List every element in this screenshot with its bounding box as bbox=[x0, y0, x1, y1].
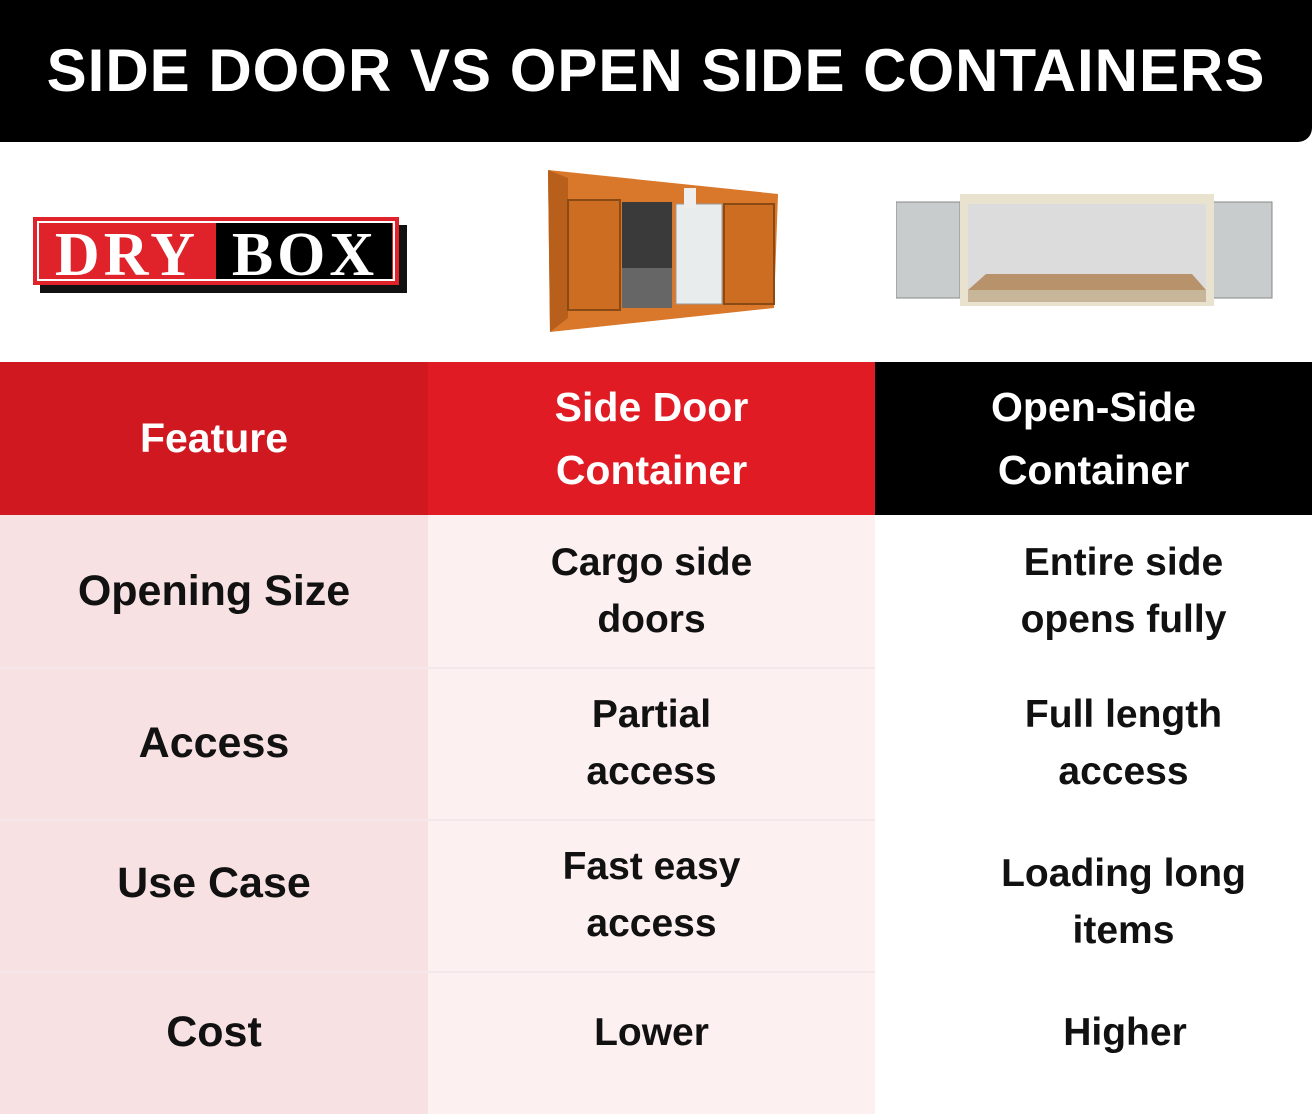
row: opening size: Entire side bbox=[1024, 541, 1223, 584]
row: opening size: Opening Size bbox=[78, 566, 350, 614]
row: cost: Cost bbox=[166, 1008, 262, 1056]
row: access: Full length bbox=[1025, 693, 1222, 736]
row: use case: Loading long bbox=[1001, 852, 1246, 894]
header: open-side container: Open-Side bbox=[991, 384, 1196, 430]
row: cost: Lower bbox=[594, 1010, 709, 1054]
title: SIDE DOOR VS OPEN SIDE CONTAINERS bbox=[47, 37, 1265, 104]
header: side door container bbox=[428, 362, 875, 515]
row: access bbox=[139, 693, 1222, 793]
row: opening size: Cargo side bbox=[551, 541, 752, 584]
row: access: access bbox=[1058, 750, 1189, 793]
row: access: Access bbox=[139, 718, 289, 766]
row: use case: Use Case bbox=[117, 858, 311, 906]
header: side door container: Container bbox=[556, 446, 747, 492]
row: cost bbox=[166, 1008, 1187, 1056]
row: access: access bbox=[586, 750, 717, 793]
row: use case: access bbox=[586, 902, 717, 945]
row: cost: Higher bbox=[1063, 1010, 1187, 1054]
title bbox=[0, 0, 1312, 142]
header: side door container: Side Door bbox=[555, 384, 748, 430]
logo: drybox bbox=[33, 217, 407, 293]
row: use case bbox=[117, 845, 1246, 952]
header: open-side container: Container bbox=[998, 446, 1189, 492]
header: open-side container bbox=[875, 362, 1312, 515]
header: feature: Feature bbox=[140, 415, 288, 461]
row: opening size: doors bbox=[597, 598, 706, 641]
column backgrounds bbox=[0, 515, 428, 1114]
icon: side door container bbox=[548, 170, 778, 332]
row: opening size: opens fully bbox=[1021, 598, 1226, 641]
header: feature bbox=[0, 362, 428, 515]
icon: open side container bbox=[896, 194, 1272, 306]
row: use case: Fast easy bbox=[563, 845, 740, 888]
logo: drybox: BOX bbox=[232, 221, 378, 289]
logo: drybox: DRY bbox=[55, 221, 199, 289]
row: opening size bbox=[78, 541, 1226, 641]
row: access: Partial bbox=[592, 693, 711, 736]
row: use case: items bbox=[1073, 908, 1174, 952]
